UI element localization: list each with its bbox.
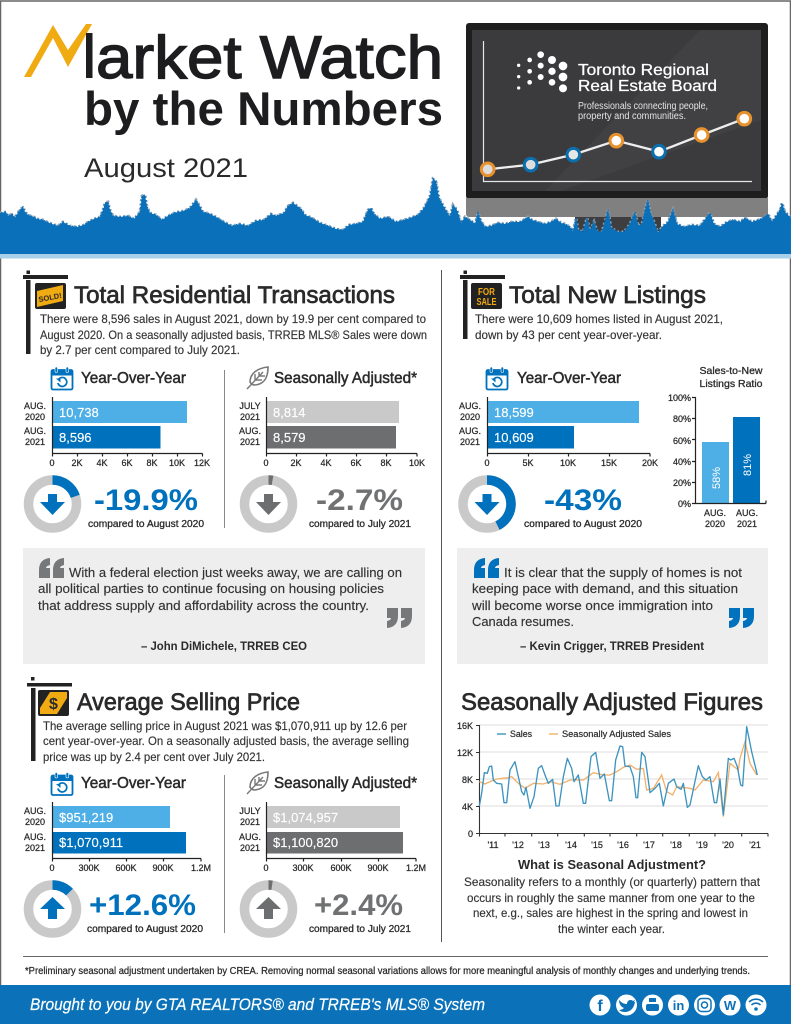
description: There were 8,596 sales in August 2021, down by 19.9 per cent compared to — [40, 312, 426, 326]
stat caption: compared to July 2021 — [309, 519, 411, 530]
donut: -19.9% — [28, 480, 76, 528]
bar chart: year-over-year sales: AUG. — [24, 401, 46, 411]
bar chart: sales-to-new listings ratio: 80% — [673, 414, 691, 424]
bar chart: year-over-year price: 600K — [115, 863, 137, 873]
explainer text: the winter each year. — [558, 922, 665, 936]
icon: facebook: f — [597, 998, 603, 1015]
quote text — [38, 565, 402, 613]
line chart: sales vs seasonally adjusted sales: '14 — [565, 840, 577, 850]
bar chart: seasonally adjusted sales — [239, 397, 425, 468]
monitor bezel — [466, 23, 768, 199]
line chart: sales vs seasonally adjusted sales: 0 — [468, 829, 473, 839]
donut: +12.6% — [28, 885, 76, 933]
bar chart: seasonally adjusted price: 1.2M — [406, 863, 426, 873]
line chart: sales vs seasonally adjusted sales: '21 — [749, 840, 761, 850]
bar chart: year-over-year sales: 10,738 — [59, 405, 99, 420]
bar chart: seasonally adjusted sales: 2021 — [240, 437, 260, 447]
bar chart: seasonally adjusted sales: 8K — [380, 458, 392, 468]
bar chart: year-over-year price: AUG. — [24, 832, 46, 842]
bar chart: seasonally adjusted sales: 4K — [320, 458, 332, 468]
description — [43, 719, 409, 764]
date: August 2021 — [84, 153, 248, 183]
skyline silhouette — [0, 179, 791, 254]
panel: total residential transactions — [23, 270, 427, 530]
panel: CEO quote — [23, 548, 425, 664]
heading: Seasonally Adjusted Figures — [461, 689, 763, 716]
line chart: sales vs seasonally adjusted sales: '13 — [538, 840, 550, 850]
line chart: sales vs seasonally adjusted sales: 12K — [457, 748, 473, 758]
footer text: Brought to you by GTA REALTORS® and TRREB's MLS® System — [30, 995, 485, 1014]
bar chart: year-over-year price: 2021 — [25, 843, 45, 853]
title: M stem — [86, 33, 92, 78]
panel: total new listings — [459, 270, 766, 530]
bar chart: year-over-year sales: 8,596 — [59, 430, 92, 445]
heading: Total New Listings — [509, 282, 706, 309]
icon: wifi feed — [746, 994, 766, 1016]
icon: leaf — [247, 367, 268, 389]
stat caption: compared to August 2020 — [88, 519, 204, 530]
icon: linkedin: in — [673, 998, 684, 1013]
bar chart: new listings: 2021 — [460, 437, 480, 447]
bar chart: new listings: 0 — [484, 458, 490, 468]
bar chart: year-over-year price: 0 — [49, 863, 55, 873]
bar chart: seasonally adjusted price: JULY — [239, 806, 261, 816]
icon: wordpress: W — [724, 998, 737, 1013]
icon: calendar — [486, 367, 508, 390]
line chart: sales vs seasonally adjusted sales: '18 — [670, 840, 682, 850]
heading: Average Selling Price — [77, 689, 300, 716]
bar chart: seasonally adjusted price: $1,074,957 — [273, 810, 338, 825]
stat caption: compared to July 2021 — [309, 924, 411, 935]
bar chart: year-over-year sales: 8K — [146, 458, 158, 468]
icon: calendar — [52, 367, 72, 390]
stat: +2.4%: +2.4% — [314, 889, 403, 922]
description: The average selling price in August 2021 was $1,070,911 up by 12.6 per — [43, 719, 407, 733]
bar chart: seasonally adjusted sales: 2021 — [240, 412, 260, 422]
donut: -2.7% — [244, 480, 292, 528]
footnote: *Preliminary seasonal adjustment undertaken by CREA. Removing normal seasonal variations allows for more meaningful analysis of monthly changes and underlying trends. — [25, 966, 750, 977]
icon: calendar — [52, 772, 72, 795]
seasonally adjusted heading: Seasonally Adjusted* — [274, 370, 417, 387]
skyline band — [0, 179, 791, 258]
title line one: arket Watch — [96, 24, 443, 91]
line chart: sales vs seasonally adjusted sales: '20 — [722, 840, 734, 850]
year-over-year heading: Year-Over-Year — [81, 370, 187, 387]
title line two: by the Numbers — [84, 82, 443, 135]
line chart: sales vs seasonally adjusted sales: Seasonally Adjusted Sales — [562, 729, 672, 739]
attribution: – Kevin Crigger, TRREB President — [520, 639, 704, 653]
bar chart: new listings: 15K — [601, 458, 617, 468]
icon: dollar sign — [27, 677, 72, 761]
icon: youtube — [642, 994, 663, 1016]
title — [24, 24, 443, 183]
bar chart: new listings: AUG. — [459, 401, 481, 411]
footer band — [0, 985, 791, 1024]
explainer heading: What is Seasonal Adjustment? — [518, 857, 706, 872]
central vertical divider — [440, 270, 442, 942]
bar chart: seasonally adjusted sales: 2K — [290, 458, 302, 468]
line chart: sales vs seasonally adjusted sales: 8K — [462, 775, 473, 785]
bar chart: sales-to-new listings ratio: AUG. — [704, 508, 726, 518]
screen axes — [484, 41, 752, 182]
icon: sold sign — [23, 270, 68, 354]
bar chart: new listings: 10,609 — [494, 430, 534, 445]
icon: sold sign: SOLD! — [38, 291, 62, 304]
bar chart: sales-to-new listings ratio: 81% — [742, 454, 754, 476]
quote text: With a federal election just weeks away, we are calling on — [69, 565, 402, 580]
bar chart: seasonally adjusted sales: 8,579 — [273, 430, 306, 445]
monitor with logo and line chart — [466, 23, 768, 235]
stat: -2.7%: -2.7% — [316, 484, 403, 517]
bar chart: year-over-year sales: AUG. — [24, 426, 46, 436]
description: There were 10,609 homes listed in August 2021, — [475, 312, 723, 326]
bar chart: year-over-year price: 900K — [152, 863, 174, 873]
bar chart: year-over-year sales: 10K — [169, 458, 185, 468]
line chart: sales vs seasonally adjusted sales: '15 — [591, 840, 603, 850]
bar chart: seasonally adjusted price: 900K — [367, 863, 389, 873]
icon: opening quote mark — [39, 558, 64, 578]
bar chart: sales-to-new listings ratio: 2020 — [705, 519, 725, 529]
bar chart: sales-to-new listings ratio: Listings Ratio — [699, 378, 763, 390]
line chart: sales vs seasonally adjusted sales: 16K — [457, 721, 473, 731]
icon: gold M logo mark — [24, 24, 92, 77]
heading: Total Residential Transactions — [74, 282, 395, 309]
bar chart: new listings: 10K — [560, 458, 576, 468]
bar chart: year-over-year price: $951,219 — [59, 810, 113, 825]
line chart: sales vs seasonally adjusted sales — [457, 721, 768, 850]
bar chart: sales-to-new listings ratio: 40% — [673, 457, 691, 467]
bar chart: new listings: 18,599 — [494, 405, 534, 420]
bar chart: year-over-year sales: 2020 — [25, 412, 45, 422]
icon: for sale sign: FOR — [478, 287, 496, 298]
quote text: all political parties to continue focusing on housing policies — [38, 581, 385, 596]
stat: -43%: -43% — [544, 484, 622, 517]
bar chart: seasonally adjusted sales: 10K — [409, 458, 425, 468]
bar chart: seasonally adjusted sales: 0 — [263, 458, 269, 468]
panel: president quote — [457, 548, 768, 664]
description: price was up by 2.4 per cent over July 2021. — [43, 750, 265, 764]
bar chart: sales-to-new listings ratio: 20% — [673, 478, 691, 488]
footer background — [0, 985, 791, 1024]
bar chart: year-over-year sales: 2021 — [25, 437, 45, 447]
seasonally adjusted heading: Seasonally Adjusted* — [274, 775, 417, 792]
description — [40, 312, 427, 357]
quote text: that address supply and affordability across the country. — [38, 598, 369, 613]
bar chart: sales-to-new listings ratio: 60% — [673, 436, 691, 446]
bar chart: new listings: 5K — [522, 458, 534, 468]
logo text: Toronto Regional — [578, 62, 709, 79]
bar chart: sales-to-new listings ratio — [668, 365, 766, 529]
icon: dollar sign: $ — [49, 696, 58, 713]
panel: average selling price — [24, 677, 426, 935]
bar chart: sales-to-new listings ratio: Sales-to-New — [699, 365, 763, 377]
quote text: will become worse once immigration into — [471, 598, 713, 613]
bar chart: year-over-year price: 300K — [78, 863, 100, 873]
description: by 2.7 per cent compared to July 2021. — [40, 343, 240, 357]
quote background — [23, 548, 425, 664]
icon: opening quote mark — [474, 558, 499, 578]
icon: for sale sign — [460, 270, 505, 339]
bar chart: seasonally adjusted price: 2021 — [240, 843, 260, 853]
bar chart: seasonally adjusted price: AUG. — [239, 832, 261, 842]
bar chart: year-over-year price: 1.2M — [191, 863, 211, 873]
bar chart: sales-to-new listings ratio: 58% — [711, 467, 723, 489]
bar chart: sales-to-new listings ratio: 0% — [678, 499, 691, 509]
logo text line two: Real Estate Board — [578, 78, 717, 95]
stat: +12.6%: +12.6% — [89, 889, 196, 922]
bar chart: year-over-year sales: 0 — [49, 458, 55, 468]
bar chart: year-over-year sales: 12K — [194, 458, 210, 468]
explainer text: occurs in roughly the same manner from one year to the — [467, 891, 755, 905]
monitor chin — [466, 198, 768, 217]
monitor screen — [472, 30, 761, 191]
explainer text: Seasonality refers to a monthly (or quarterly) pattern that — [464, 875, 761, 889]
attribution: – John DiMichele, TRREB CEO — [141, 639, 307, 653]
bar chart: seasonally adjusted price — [239, 802, 426, 873]
description: down by 43 per cent year-over-year. — [475, 328, 662, 342]
quote text — [471, 565, 742, 629]
bar chart: sales-to-new listings ratio: AUG. — [736, 508, 758, 518]
bar chart: seasonally adjusted price: $1,100,820 — [273, 835, 338, 850]
icon: closing quote mark — [729, 608, 754, 628]
bar chart: year-over-year sales: 4K — [96, 458, 108, 468]
bar chart: seasonally adjusted price: 300K — [292, 863, 314, 873]
screen line chart — [481, 112, 751, 176]
line chart: sales vs seasonally adjusted sales: Sales — [510, 729, 532, 739]
icon: for sale sign: SALE — [476, 297, 497, 308]
line chart: sales vs seasonally adjusted sales: '11 — [487, 840, 499, 850]
stat caption: compared to August 2020 — [87, 924, 203, 935]
year-over-year heading: Year-Over-Year — [517, 370, 622, 387]
tagline: Professionals connecting people, — [578, 101, 708, 112]
bar chart: year-over-year price — [24, 802, 211, 873]
stat caption: compared to August 2020 — [524, 519, 642, 530]
line chart: sales vs seasonally adjusted sales: '16 — [617, 840, 629, 850]
bar chart: seasonally adjusted price: 2021 — [240, 817, 260, 827]
quote text: keeping pace with demand, and this situation — [472, 581, 738, 596]
panel: seasonally adjusted figures — [457, 689, 768, 936]
bar chart: seasonally adjusted price: 600K — [330, 863, 352, 873]
bar chart: year-over-year price: 2020 — [25, 817, 45, 827]
year-over-year heading: Year-Over-Year — [81, 775, 187, 792]
light blue stripe — [0, 254, 791, 258]
stat: -19.9%: -19.9% — [94, 484, 198, 517]
bar chart: year-over-year price: $1,070,911 — [59, 835, 123, 850]
icon: leaf — [247, 772, 268, 794]
line chart: sales vs seasonally adjusted sales: 4K — [462, 802, 473, 812]
quote text: Canada resumes. — [472, 614, 574, 629]
bar chart: seasonally adjusted sales: 8,814 — [273, 405, 306, 420]
line chart: sales vs seasonally adjusted sales: '19 — [696, 840, 708, 850]
line chart: sales vs seasonally adjusted sales: '17 — [643, 840, 655, 850]
description: cent year-over-year. On a seasonally adjusted basis, the average selling — [43, 734, 409, 748]
description: August 2020. On a seasonally adjusted basis, TRREB MLS® Sales were down — [40, 328, 427, 342]
bar chart: new listings — [459, 397, 658, 468]
tagline line two: property and communities. — [578, 111, 686, 122]
bar chart: new listings: 20K — [642, 458, 658, 468]
donut: -43% — [463, 480, 511, 528]
icon: instagram — [694, 994, 715, 1016]
bar chart: seasonally adjusted price: 0 — [263, 863, 269, 873]
icon: wordpress — [720, 994, 740, 1016]
bar chart: seasonally adjusted sales: JULY — [239, 401, 261, 411]
bar chart: new listings: 2020 — [460, 412, 480, 422]
bar chart: sales-to-new listings ratio: 2021 — [737, 519, 757, 529]
donut: +2.4% — [244, 885, 292, 933]
quote background — [457, 548, 768, 664]
bar chart: new listings: AUG. — [459, 426, 481, 436]
bar chart: seasonally adjusted sales: AUG. — [239, 426, 261, 436]
bar chart: year-over-year sales: 6K — [121, 458, 133, 468]
icon: closing quote mark — [387, 608, 412, 628]
screen glare — [545, 30, 761, 191]
bar chart: seasonally adjusted sales: 6K — [350, 458, 362, 468]
bar chart: year-over-year sales: 2K — [71, 458, 83, 468]
line chart: sales vs seasonally adjusted sales: '12 — [512, 840, 524, 850]
bar chart: year-over-year price: AUG. — [24, 806, 46, 816]
icon: facebook — [590, 994, 610, 1016]
description — [475, 312, 723, 342]
icon: twitter — [616, 994, 637, 1016]
quote text: It is clear that the supply of homes is not — [504, 565, 742, 580]
explainer text — [464, 875, 761, 936]
icon: linkedin — [668, 994, 689, 1016]
explainer text: next, e.g., sales are highest in the spring and lowest in — [473, 906, 748, 920]
bar chart: year-over-year sales — [24, 397, 210, 468]
monitor stand — [575, 217, 661, 235]
icon: logo dots — [517, 51, 567, 92]
bar chart: sales-to-new listings ratio: 100% — [668, 393, 691, 403]
